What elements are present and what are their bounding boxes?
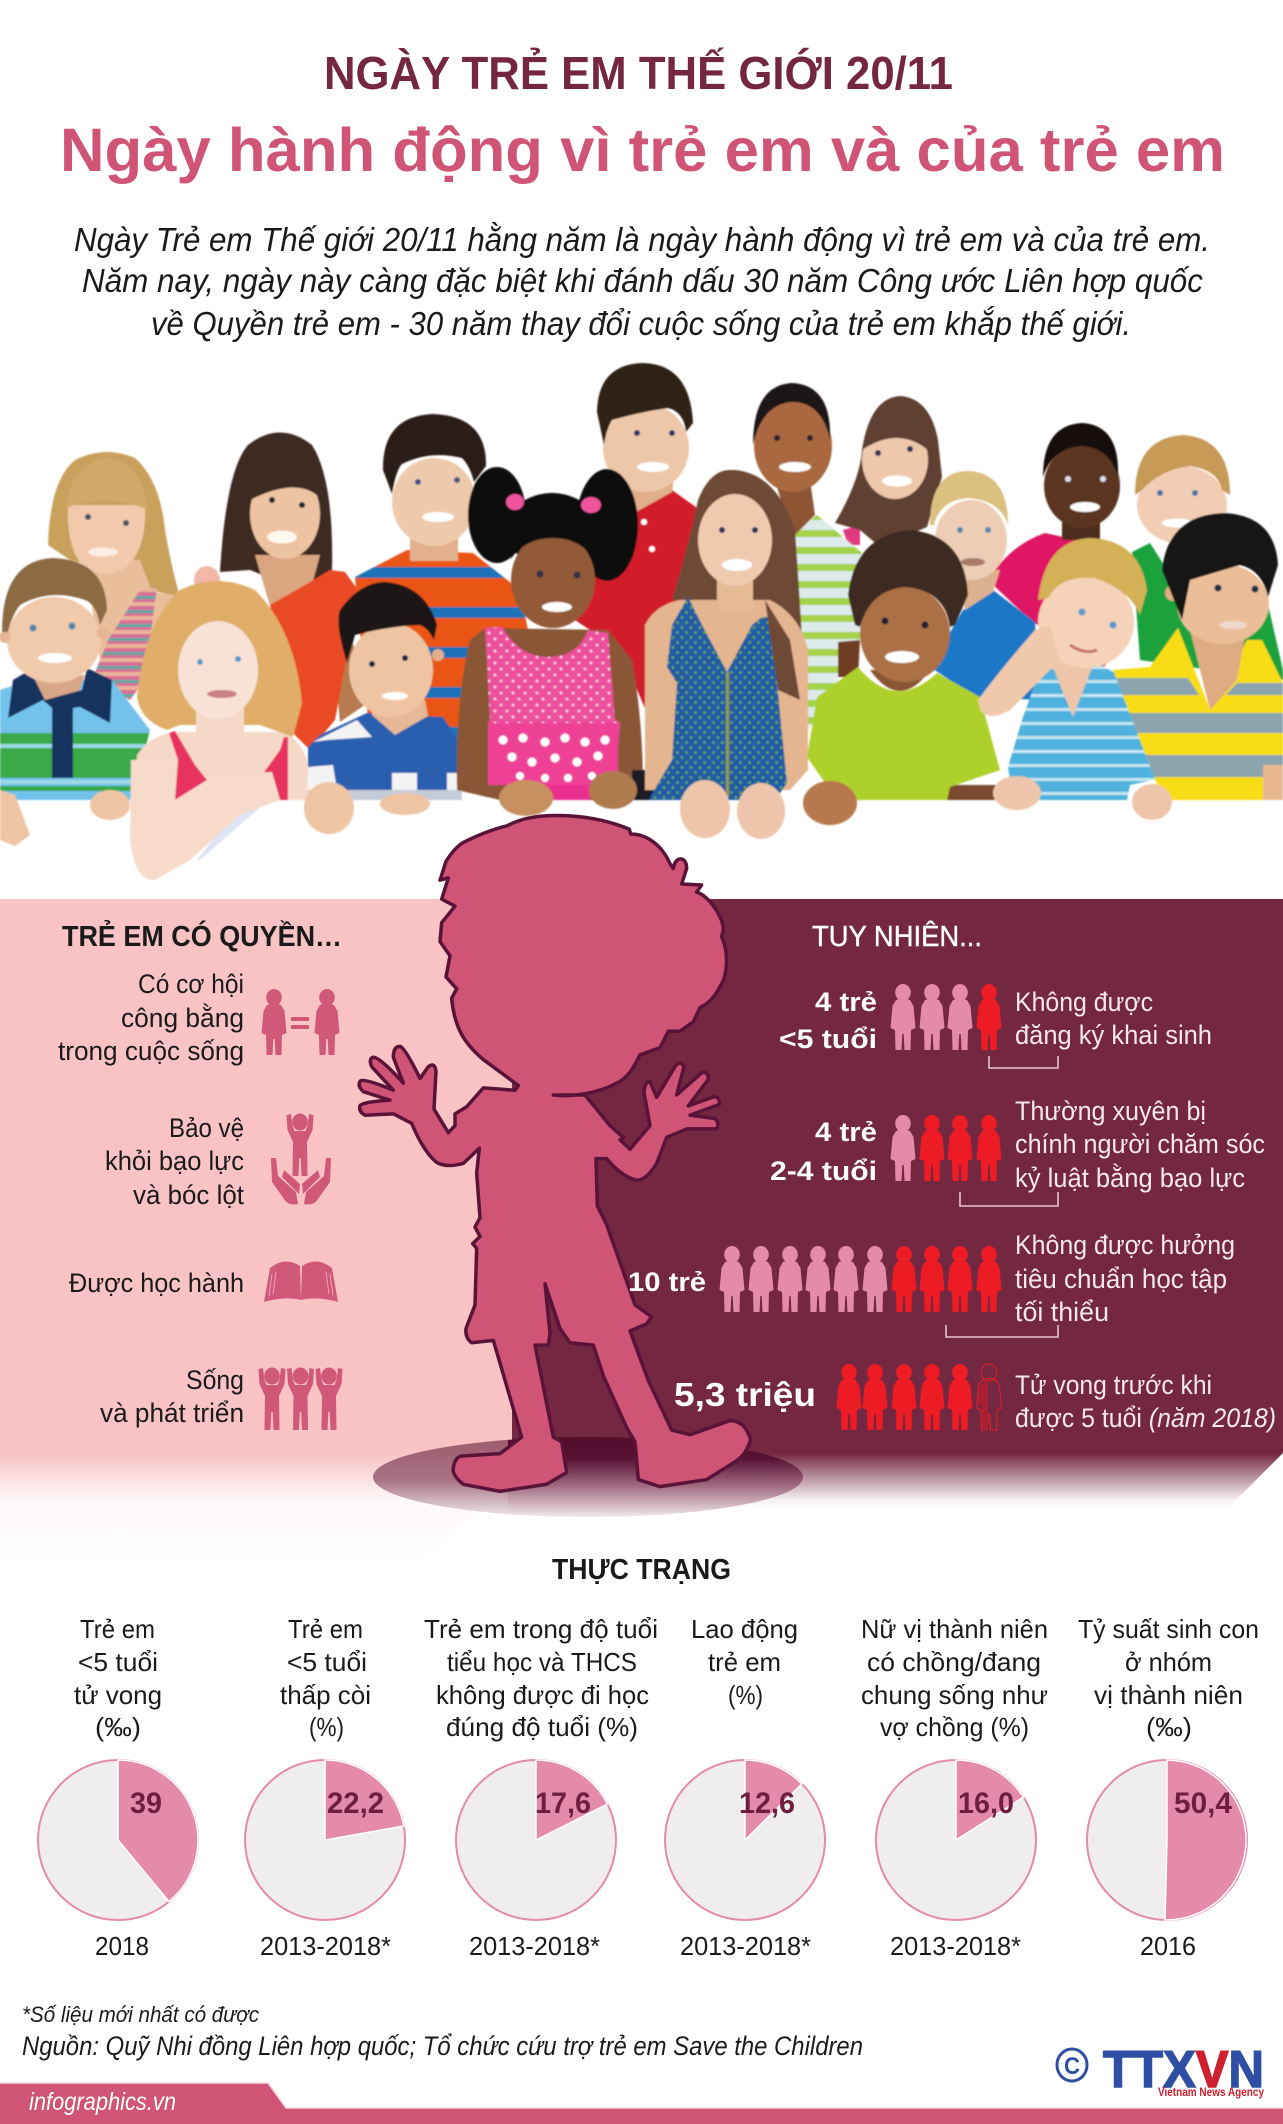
intro text: Ngày Trẻ em Thế giới 20/11 hằng năm là ngày hành động vì trẻ em và của trẻ em. [74, 221, 1210, 258]
stat row: minimum learning standards: Không được hưởng [1015, 1230, 1235, 1260]
pie column: under-5 mortality: <5 tuổi [78, 1647, 158, 1677]
child: girl with long dark hair [194, 432, 372, 750]
child: boy in lime shirt [807, 530, 1000, 800]
right: protection text: và bóc lột [133, 1180, 244, 1210]
stat row: birth registration: Không được [1015, 987, 1153, 1017]
pie column: child labour: Lao động [691, 1614, 798, 1644]
stat row: minimum learning standards: 10 trẻ [628, 1267, 706, 1297]
intro text: Năm nay, ngày này càng đặc biệt khi đánh dấu 30 năm Công ước Liên hợp quốc [82, 262, 1203, 299]
shadow under child [373, 1437, 803, 1517]
stat row: violent discipline: Thường xuyên bị [1015, 1096, 1206, 1126]
stat row: violent discipline [770, 1096, 1265, 1206]
pie column: stunting: <5 tuổi [287, 1647, 367, 1677]
pie column: stunting [245, 1614, 405, 1961]
icon: child held by hands [271, 1114, 331, 1204]
right: survival and development text: Sống [186, 1365, 244, 1395]
pie column: child labour: 2013-2018* [680, 1931, 811, 1961]
right: protection text: khỏi bạo lực [105, 1146, 244, 1176]
subtitle: Ngày hành động vì trẻ em và của trẻ em [60, 116, 1225, 184]
pie column: child marriage: 2013-2018* [890, 1931, 1021, 1961]
stat row: birth registration: 4 trẻ [815, 987, 877, 1017]
child silhouette [359, 816, 751, 1491]
pie column: under-5 mortality: 2018 [95, 1931, 149, 1961]
child: blonde girl at back [48, 452, 180, 700]
right: protection text [105, 1113, 244, 1210]
right: education text: Được học hành [69, 1268, 244, 1298]
pie column: stunting: 22,2 [327, 1787, 384, 1820]
website: infographics.vn [29, 2088, 176, 2116]
pie column: child labour: 12,6 [739, 1787, 795, 1820]
intro text [74, 221, 1210, 342]
pie column: under-5 mortality: (‰) [95, 1712, 141, 1742]
child: boy in blue-white shirt [307, 582, 462, 800]
pie column: child marriage [861, 1614, 1048, 1961]
logo: TTXVN: C [1064, 2053, 1080, 2080]
pie column: out of school: Trẻ em trong độ tuổi [424, 1614, 658, 1644]
stat row: violent discipline: 4 trẻ [815, 1117, 877, 1147]
stat row: violent discipline: chính người chăm sóc [1015, 1129, 1265, 1159]
pie column: stunting: 2013-2018* [260, 1931, 391, 1961]
footer band [0, 2083, 1283, 2124]
stat row: under-five deaths [674, 1364, 1276, 1433]
pie column: adolescent birth rate: Tỷ suất sinh con [1078, 1614, 1259, 1644]
pie column: child marriage: 16,0 [958, 1787, 1014, 1820]
pie column: stunting: thấp còi [280, 1680, 371, 1710]
source: Nguồn: Quỹ Nhi đồng Liên hợp quốc; Tổ chức cứu trợ trẻ em Save the Children [22, 2031, 863, 2061]
child: girl in pink polka dot dress [457, 467, 643, 800]
child: blond boy in light blue shirt [978, 538, 1167, 800]
stat row: birth registration: đăng ký khai sinh [1015, 1020, 1212, 1050]
right: equal opportunity text [58, 969, 244, 1066]
right: equal opportunity text: trong cuộc sống [58, 1036, 244, 1066]
pie column: adolescent birth rate: vị thành niên [1094, 1680, 1243, 1710]
heading: children have rights: TRẺ EM CÓ QUYỀN… [62, 919, 342, 953]
intro text: về Quyền trẻ em - 30 năm thay đổi cuộc sống của trẻ em khắp thế giới. [151, 305, 1131, 342]
stat row: minimum learning standards: tối thiểu [1015, 1297, 1109, 1327]
pie column: child marriage: có chồng/đang [867, 1647, 1041, 1677]
pie column: adolescent birth rate: 50,4 [1174, 1787, 1232, 1820]
right: protection text: Bảo vệ [169, 1113, 244, 1143]
panel: children's rights [0, 899, 512, 1560]
stat row: under-five deaths: 5,3 triệu [674, 1376, 816, 1413]
pie column: adolescent birth rate: ở nhóm [1125, 1647, 1212, 1677]
stat row: birth registration: <5 tuổi [779, 1024, 877, 1054]
child: boy in orange striped shirt [355, 414, 530, 760]
pie column: child labour [665, 1614, 825, 1961]
logo: TTXVN: Vietnam News Agency [1158, 2085, 1264, 2099]
pie column: out of school: 17,6 [535, 1787, 591, 1820]
child: boy in magenta shirt [988, 423, 1125, 668]
pie column: child marriage: vợ chồng (%) [880, 1712, 1029, 1742]
child: girl in blue dress [632, 470, 808, 800]
icon: three children arms raised [258, 1368, 342, 1430]
pie column: child labour: trẻ em [708, 1647, 781, 1677]
stat row: under-five deaths: Tử vong trước khi [1015, 1370, 1212, 1400]
child: blond boy in green shirt [1132, 435, 1283, 680]
logo: TTXVN: TTXVN [1103, 2041, 1264, 2099]
stat row: minimum learning standards [628, 1230, 1235, 1337]
pie column: adolescent birth rate [1078, 1614, 1259, 1961]
pie column: under-5 mortality: 39 [130, 1787, 162, 1820]
pie column: child marriage: Nữ vị thành niên [861, 1614, 1048, 1644]
stat row: minimum learning standards: tiêu chuẩn học tập [1015, 1264, 1227, 1294]
pie column: stunting: (%) [309, 1712, 344, 1742]
child: girl with brown hair [835, 396, 942, 547]
pie column: out of school [424, 1614, 658, 1961]
title: NGÀY TRẺ EM THẾ GIỚI 20/11 [324, 47, 953, 99]
icon: two equal children [262, 989, 340, 1055]
right: survival and development text: và phát triển [100, 1398, 244, 1428]
pie column: adolescent birth rate: 2016 [1140, 1931, 1196, 1961]
pie column: under-5 mortality [38, 1614, 198, 1961]
right: equal opportunity text: Có cơ hội [138, 969, 244, 999]
stat row: under-five deaths: được 5 tuổi (năm 2018) [1015, 1403, 1276, 1433]
panel: however [512, 899, 1283, 1508]
stat row: violent discipline: kỷ luật bằng bạo lực [1015, 1162, 1245, 1193]
pie column: under-5 mortality: Trẻ em [80, 1614, 155, 1644]
child: tall boy in red polo [575, 363, 700, 720]
photo illustration: group of children [0, 363, 1283, 880]
stat row: birth registration [779, 984, 1212, 1068]
stat row: violent discipline: 2-4 tuổi [770, 1156, 877, 1186]
footnote: *Số liệu mới nhất có được [22, 2002, 259, 2027]
pie column: adolescent birth rate: (‰) [1146, 1712, 1192, 1742]
right: survival and development text [100, 1365, 244, 1428]
child: boy in green-white stripes [753, 383, 862, 730]
icon: open book [264, 1261, 338, 1302]
pie column: out of school: 2013-2018* [469, 1931, 600, 1961]
hands resting on banner [0, 771, 1172, 846]
child: front boy in striped polo [0, 558, 150, 800]
heading: current situation: THỰC TRẠNG [552, 1554, 731, 1586]
child: small blond boy in blue shirt [930, 471, 1040, 700]
child: boy in yellow-grey stripes [1100, 513, 1283, 800]
pie column: stunting: Trẻ em [288, 1614, 363, 1644]
panel bottom fade [0, 1453, 1283, 1560]
right: equal opportunity text: công bằng [121, 1002, 244, 1033]
pie column: out of school: không được đi học [436, 1680, 649, 1710]
pie column: out of school: tiểu học và THCS [447, 1647, 637, 1677]
heading: however: TUY NHIÊN... [812, 920, 982, 953]
pie column: child marriage: chung sống như [861, 1680, 1048, 1710]
pie column: out of school: đúng độ tuổi (%) [446, 1712, 638, 1742]
child: curly-haired girl [130, 581, 308, 880]
pie column: child labour: (%) [728, 1680, 763, 1710]
pie column: under-5 mortality: tử vong [74, 1680, 162, 1710]
